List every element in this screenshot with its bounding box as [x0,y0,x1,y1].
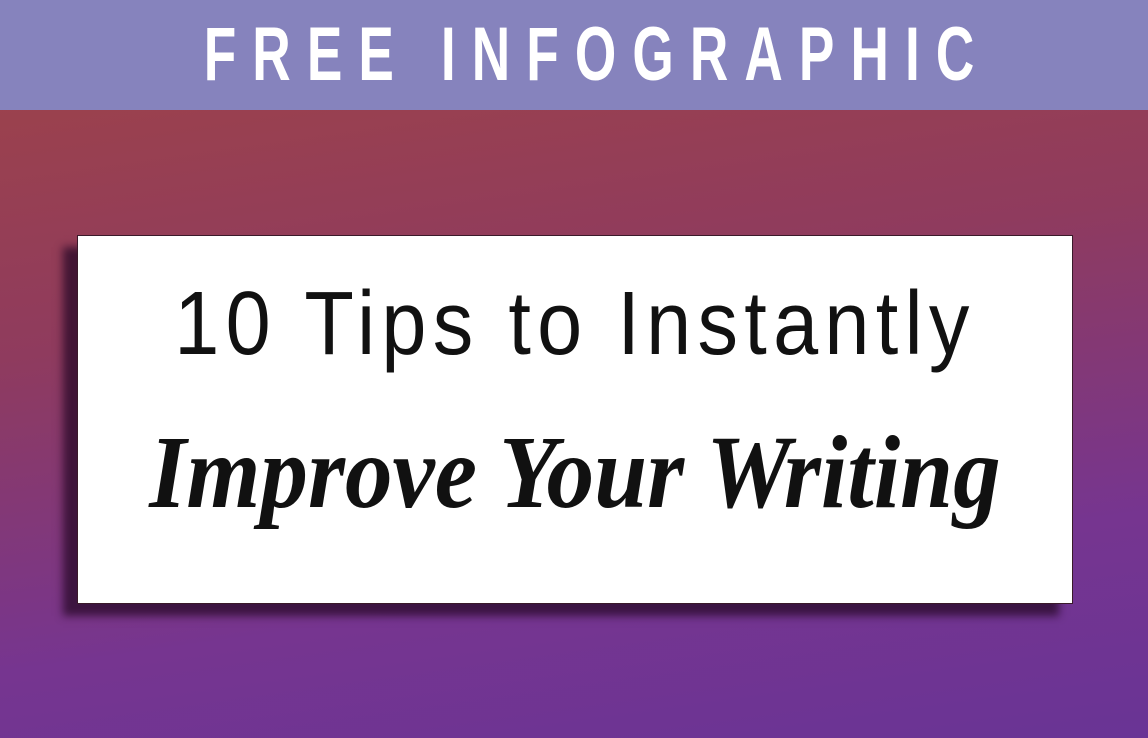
header text: FREE INFOGRAPHIC [204,12,990,97]
title line 2: Improve Your Writing [149,415,1001,530]
title card [77,235,1073,604]
header bar [0,0,1148,110]
title line 1: 10 Tips to Instantly [174,274,976,374]
